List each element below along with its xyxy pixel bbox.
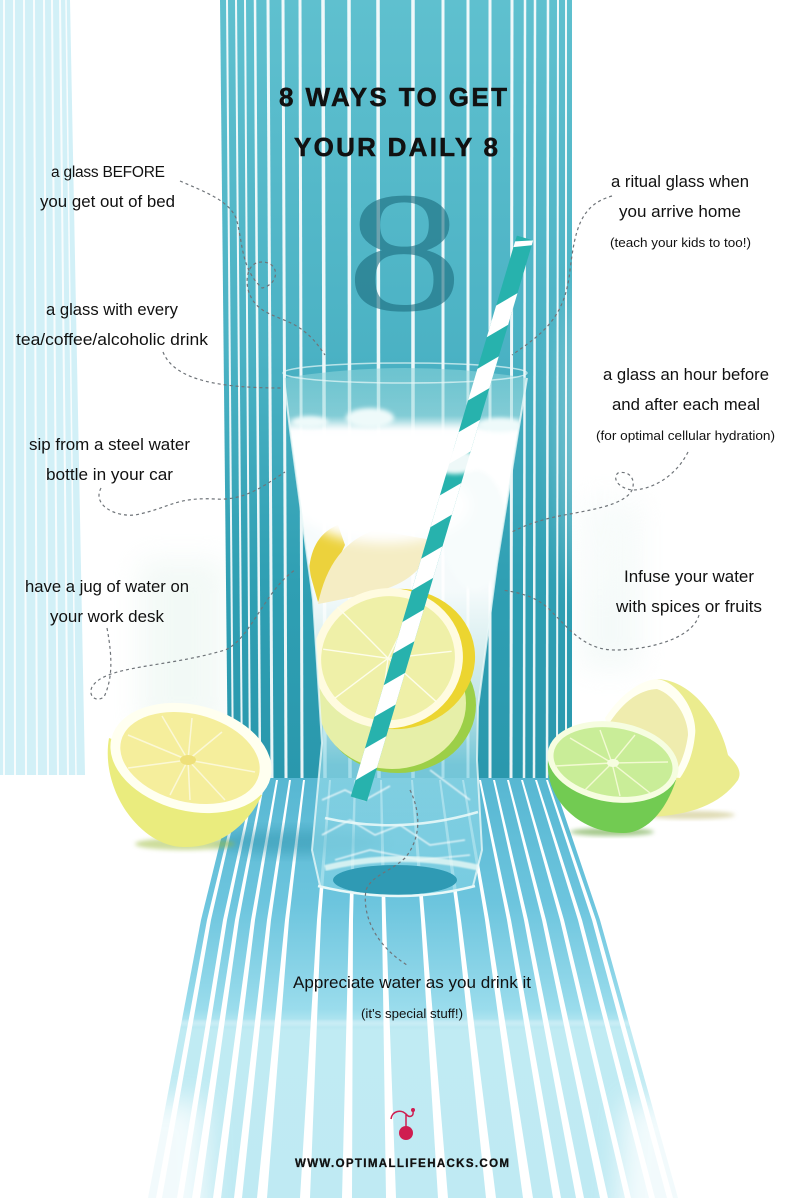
tip: infuse water [615,567,762,616]
tip: a glass with every drink [16,300,209,349]
central striped towel, hanging [220,0,572,778]
ice veil over the straw [431,450,479,474]
title: 8 WAYS TO GET [279,82,507,112]
tip: jug of water [25,577,189,626]
tip: ritual glass: (teach your kids to too!) [610,235,751,250]
tip: a glass before bed [40,164,175,211]
big numeral 8: 8 [346,158,463,348]
soft ice over the wedge [319,525,430,549]
tip: infuse water: with spices or fruits [615,597,762,616]
lemon slice [316,588,476,730]
website url: WWW.OPTIMALLIFEHACKS.COM [295,1158,509,1170]
dashed connectors [91,181,699,965]
tip: appreciate water: Appreciate water as you drink it [293,973,531,992]
icon: cherry logo [391,1108,415,1140]
upper lemon wedge [309,525,432,604]
glass rim and highlights [283,363,527,896]
title: YOUR DAILY 8 [294,132,498,162]
tip: glass around meals: a glass an hour before [603,365,769,384]
lemon half, left [99,687,283,850]
water ripples in the base [322,770,470,860]
tip: infuse water: Infuse your water [624,567,754,586]
tip: ritual glass [610,172,751,250]
left faint striped towel [0,0,85,775]
lemon half, right [605,679,740,819]
tip: jug of water: your work desk [50,607,164,626]
ice and water [290,405,520,570]
tip: glass around meals: and after each meal [612,395,760,414]
tip: ritual glass: a ritual glass when [611,172,749,191]
tip: a glass before bed: a glass BEFORE [51,164,165,181]
tip: a glass before bed: you get out of bed [40,192,175,211]
tip: a glass with every drink: a glass with every [46,300,178,319]
tip: steel water bottle [29,435,190,484]
lime half, right [542,712,684,836]
tip: jug of water: have a jug of water on [25,577,189,596]
tip: glass around meals [596,365,775,443]
soft glow beside the glass [560,280,640,600]
tip: appreciate water: (it's special stuff!) [361,1006,463,1021]
soft tint on the white wall [140,500,640,730]
title [279,82,507,162]
striped paper straw [351,236,533,801]
tip: ritual glass: you arrive home [619,202,741,221]
glass body [284,368,527,897]
tip: steel water bottle: sip from a steel water [29,435,190,454]
dark base reflection [333,865,457,895]
lime slice [319,680,476,773]
tip: appreciate water [293,973,531,1021]
foreground striped towel in perspective [110,778,710,1198]
tip: steel water bottle: bottle in your car [46,465,173,484]
tip: glass around meals: (for optimal cellular hydration) [596,428,775,443]
tip: a glass with every drink: tea/coffee/alcoholic drink [16,330,209,349]
